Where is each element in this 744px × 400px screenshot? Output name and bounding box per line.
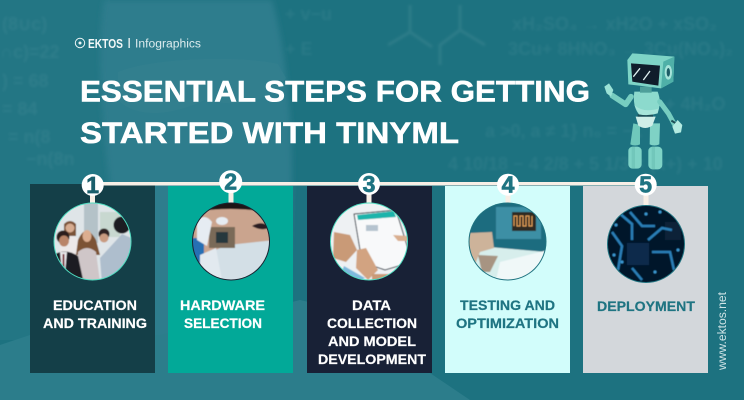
step number badges: 2 [224, 169, 237, 195]
photo 2: masked engineer holding chip [192, 202, 270, 280]
background: teal with robot face and formulas: xH₂SO₄ → xH2O + xSO₂ [512, 14, 717, 34]
step 1 label: EDUCATION [53, 298, 137, 313]
step 4 label [456, 298, 559, 331]
photo 5: blue circuit board [606, 204, 686, 284]
logo: EKTOS Infographics: EKTOS [88, 37, 123, 51]
background: teal with robot face and formulas: + 4H₂O [665, 94, 726, 114]
photo 4: oscilloscope workbench [468, 202, 546, 280]
step number badges: 3 [363, 171, 375, 197]
logo: EKTOS Infographics: Infographics [135, 38, 201, 50]
step 3 label: DATA [352, 298, 391, 313]
step number badges: 4 [502, 172, 515, 198]
step number badges [82, 169, 657, 198]
background: teal with robot face and formulas: = n(8 [8, 127, 51, 147]
title: STARTED WITH TINYML [80, 117, 459, 150]
background: teal with robot face and formulas: (8∪c) [2, 14, 47, 34]
background: teal with robot face and formulas: 3Cu+ 8HNO₃ → 3Cu(NO₃)₂ [508, 39, 733, 59]
step 2 label: HARDWARE [180, 298, 265, 313]
panel: step 1 background [30, 184, 155, 373]
logo: EKTOS Infographics [75, 37, 201, 51]
photo 3: hands on tablet with charts [330, 202, 408, 280]
title: ESSENTIAL STEPS FOR GETTING [80, 76, 590, 108]
panel: step 4 background [445, 186, 570, 373]
website label: www.ektos.net [717, 291, 729, 371]
background: teal with robot face and formulas: + E [285, 39, 313, 59]
step 4 label: OPTIMIZATION [456, 316, 559, 331]
step 1 label [43, 298, 147, 331]
step 3 label: COLLECTION [327, 316, 417, 331]
background: teal with robot face and formulas: ) = 68 [2, 71, 49, 91]
title [80, 76, 590, 150]
background: teal with robot face and formulas: + v−u [285, 4, 332, 24]
step 2 label [180, 298, 265, 331]
step 3 label: AND MODEL [328, 334, 416, 349]
background: teal with robot face and formulas: = 84 [2, 99, 38, 119]
background: teal with robot face and formulas: ∩c)=22 [0, 42, 60, 62]
connector line [90, 182, 648, 208]
step 4 label: TESTING AND [460, 298, 555, 313]
step 3 label: DEVELOPMENT [318, 352, 427, 367]
background: teal with robot face and formulas: a >0, a ≠ 1} n₀ = −1 [485, 121, 643, 141]
step number badges: 5 [639, 172, 652, 198]
step 5 label: DEPLOYMENT [597, 299, 696, 314]
background: teal with robot face and formulas: −n(8n [26, 149, 75, 169]
step number badges: 1 [86, 172, 99, 198]
panel: step 2 background [168, 186, 293, 373]
robot illustration [604, 53, 682, 169]
step 3 label [318, 298, 427, 367]
panel: step 5 background [583, 186, 708, 373]
step 2 label: SELECTION [184, 316, 262, 331]
panel: step 3 background [307, 186, 432, 373]
background: teal with robot face and formulas: 4 10/18 − 4 2/8 + 5 1/3 = (x+) + 10 [448, 154, 723, 174]
photo 1: team of people [54, 202, 132, 280]
step 1 label: AND TRAINING [43, 316, 147, 331]
